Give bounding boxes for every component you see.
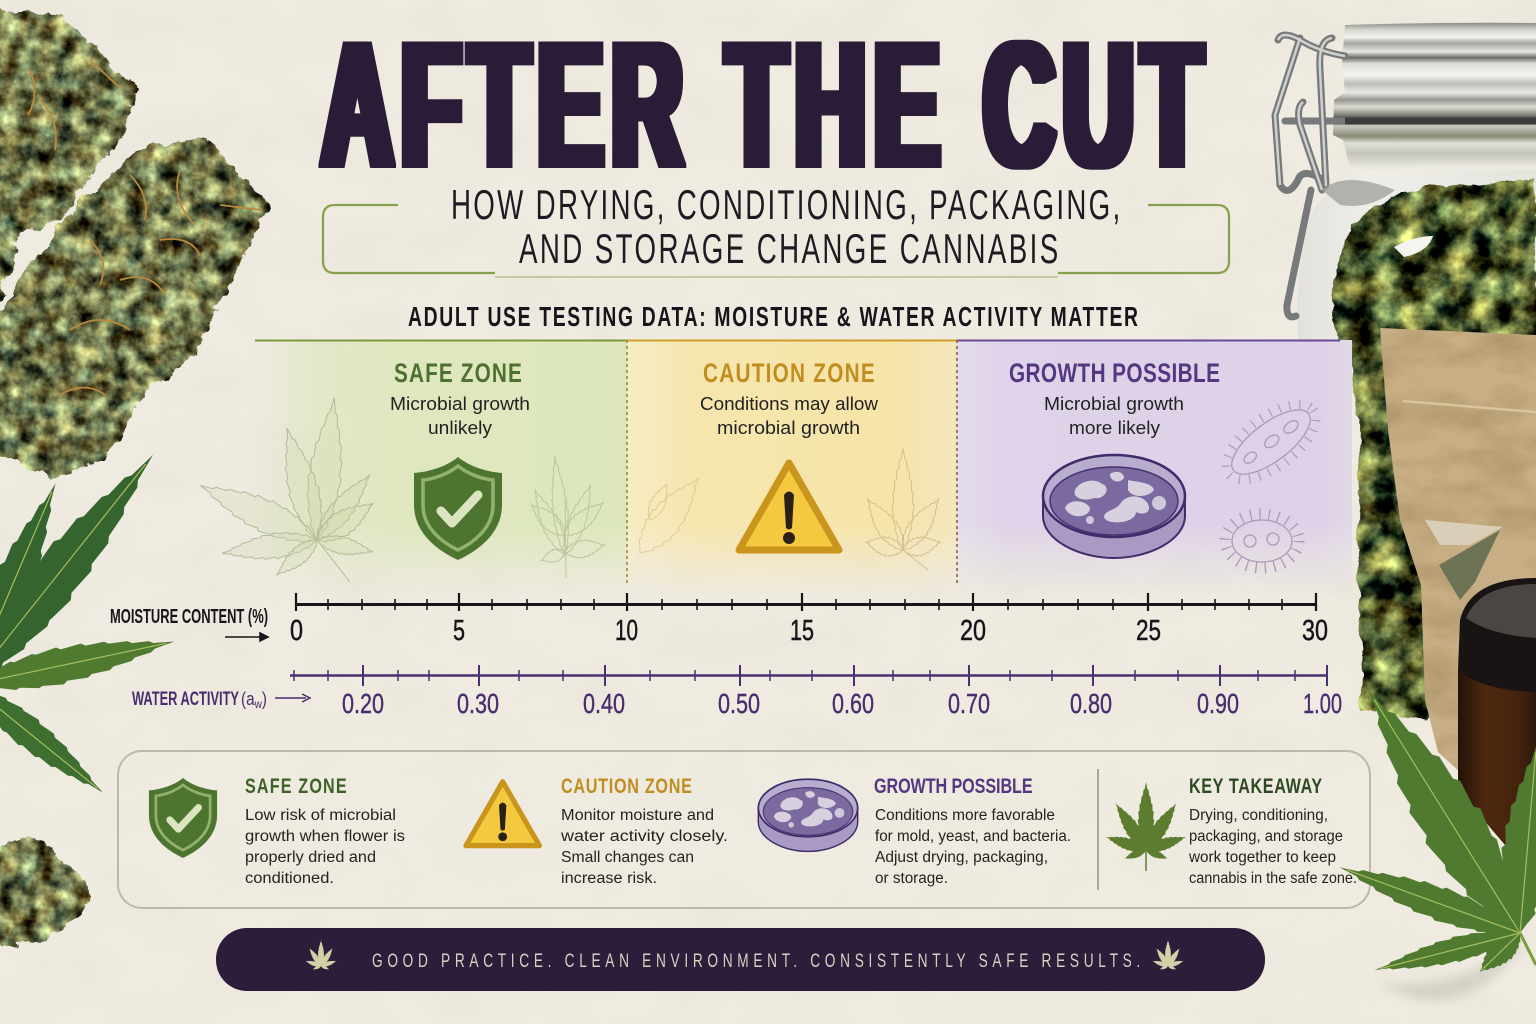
legend text: safe zone: conditioned.	[245, 870, 334, 887]
zone text: caution: microbial growth	[717, 418, 860, 438]
legend icon: leaf	[1104, 782, 1188, 871]
growth zone band	[957, 340, 1352, 596]
zone text: safe: unlikely	[428, 418, 492, 438]
footer icon: leaf right	[1152, 940, 1184, 971]
legend text: key takeaway: KEY TAKEAWAY	[1189, 774, 1323, 797]
legend text: caution zone: water activity closely.	[560, 828, 728, 845]
photo: cannabis jar and buds behind bag	[1298, 170, 1536, 720]
subtitle	[451, 181, 1120, 272]
moisture axis label: MOISTURE CONTENT (%)	[110, 606, 268, 628]
photo: left cannabis leaf	[0, 439, 178, 805]
legend text: caution zone: increase risk.	[561, 870, 657, 887]
moisture axis numbers	[290, 615, 1328, 647]
legend text: safe zone: SAFE ZONE	[245, 774, 347, 797]
legend text: growth possible: Conditions more favorable	[875, 807, 1055, 824]
legend text: growth possible: or storage.	[875, 870, 948, 887]
ghost leaf: caution zone right	[858, 448, 948, 570]
ghost leaf: safe zone large	[193, 396, 380, 582]
ghost leaf: safe zone small	[525, 455, 609, 578]
moisture axis numbers: 5	[453, 615, 465, 647]
water activity numbers: 0.30	[457, 688, 499, 719]
legend icon: warning	[466, 782, 539, 846]
moisture axis label	[110, 606, 268, 641]
title: AFTER THE CUT	[322, 6, 1202, 204]
legend text: key takeaway: Drying, conditioning,	[1189, 807, 1328, 824]
legend text: safe zone: growth when flower is	[245, 828, 405, 845]
photo: amber jar	[1458, 578, 1536, 850]
water activity axis label: (a	[241, 689, 257, 709]
moisture axis numbers: 25	[1136, 615, 1161, 647]
zone text: growth: Microbial growth	[1044, 394, 1184, 414]
legend text: growth possible: Adjust drying, packaging,	[875, 849, 1048, 866]
zone heading: growth	[1009, 358, 1220, 438]
caution zone band	[627, 340, 957, 596]
legend icon: shield	[149, 778, 217, 858]
water activity numbers: 0.50	[718, 688, 760, 719]
zone text: safe	[390, 394, 530, 438]
zone text: caution	[700, 394, 879, 438]
water activity numbers: 0.40	[583, 688, 625, 719]
moisture axis numbers: 0	[290, 615, 303, 647]
water activity numbers: 0.70	[948, 688, 990, 719]
zone top rules and dotted dividers	[255, 340, 1340, 584]
icon: caution triangle	[739, 463, 839, 550]
panel: legend	[118, 751, 1370, 908]
legend text: key takeaway: packaging, and storage	[1189, 828, 1343, 845]
legend text: safe zone	[245, 774, 405, 887]
moisture axis numbers: 30	[1302, 615, 1328, 647]
subtitle: AND STORAGE CHANGE CANNABIS	[519, 225, 1058, 272]
zone text: growth	[1044, 394, 1184, 438]
legend text: caution zone	[560, 774, 728, 887]
subtitle: HOW DRYING, CONDITIONING, PACKAGING,	[451, 181, 1120, 228]
legend text: key takeaway	[1188, 774, 1357, 887]
water activity numbers: 0.20	[342, 688, 384, 719]
legend text: safe zone: properly dried and	[245, 849, 376, 866]
water activity numbers	[342, 688, 1342, 719]
icon: safe shield	[414, 457, 502, 560]
legend text: caution zone: Monitor moisture and	[561, 807, 714, 824]
footer text: GOOD PRACTICE. CLEAN ENVIRONMENT. CONSISTENTLY SAFE RESULTS.	[372, 950, 1140, 972]
icon: petri dish	[1043, 455, 1185, 558]
water activity axis label: )	[262, 689, 267, 709]
zone text: caution: Conditions may allow	[700, 394, 879, 414]
legend text: growth possible: for mold, yeast, and bacteria.	[875, 828, 1071, 845]
legend text: growth possible	[874, 774, 1071, 887]
footer banner	[216, 928, 1265, 991]
zone heading: caution	[700, 358, 879, 438]
footer icon: leaf left	[305, 940, 337, 971]
water activity axis label: w	[254, 697, 262, 711]
water activity axis label: WATER ACTIVITY	[132, 689, 239, 710]
photo: right cannabis leaf	[1334, 672, 1536, 1001]
water activity numbers: 0.80	[1070, 688, 1112, 719]
moisture axis numbers: 15	[790, 615, 814, 647]
ghost leaf: caution zone left	[627, 468, 712, 563]
icon: microbe round	[1225, 514, 1299, 568]
photo: left buds	[0, 10, 268, 945]
zone heading: safe: SAFE ZONE	[394, 358, 522, 389]
zone heading: caution: CAUTION ZONE	[703, 358, 875, 389]
water activity numbers: 0.60	[832, 688, 874, 719]
moisture axis numbers: 20	[960, 615, 986, 647]
icon: microbe rod	[1214, 390, 1328, 494]
water activity numbers: 1.00	[1303, 688, 1342, 719]
legend text: growth possible: GROWTH POSSIBLE	[874, 774, 1033, 797]
zone text: growth: more likely	[1069, 418, 1160, 438]
zone heading: growth: GROWTH POSSIBLE	[1009, 358, 1220, 389]
legend text: safe zone: Low risk of microbial	[245, 807, 396, 824]
photo: kraft bag	[1380, 328, 1536, 800]
subheading: ADULT USE TESTING DATA: MOISTURE & WATER ACTIVITY MATTER	[408, 302, 1138, 333]
subtitle frame	[323, 205, 1229, 273]
water activity axis	[290, 665, 1342, 719]
legend text: caution zone: Small changes can	[561, 849, 694, 866]
moisture axis numbers: 10	[615, 615, 638, 647]
moisture axis	[290, 593, 1328, 647]
zone heading: safe	[390, 358, 530, 438]
zone text: safe: Microbial growth	[390, 394, 530, 414]
water activity numbers: 0.90	[1197, 688, 1239, 719]
safe zone band	[250, 340, 1352, 596]
legend text: caution zone: CAUTION ZONE	[561, 774, 692, 797]
legend icon: petri dish	[758, 779, 858, 851]
legend text: key takeaway: cannabis in the safe zone.	[1189, 870, 1357, 887]
photo: jar lid and clamp	[1275, 23, 1536, 317]
legend text: key takeaway: work together to keep	[1188, 849, 1336, 866]
